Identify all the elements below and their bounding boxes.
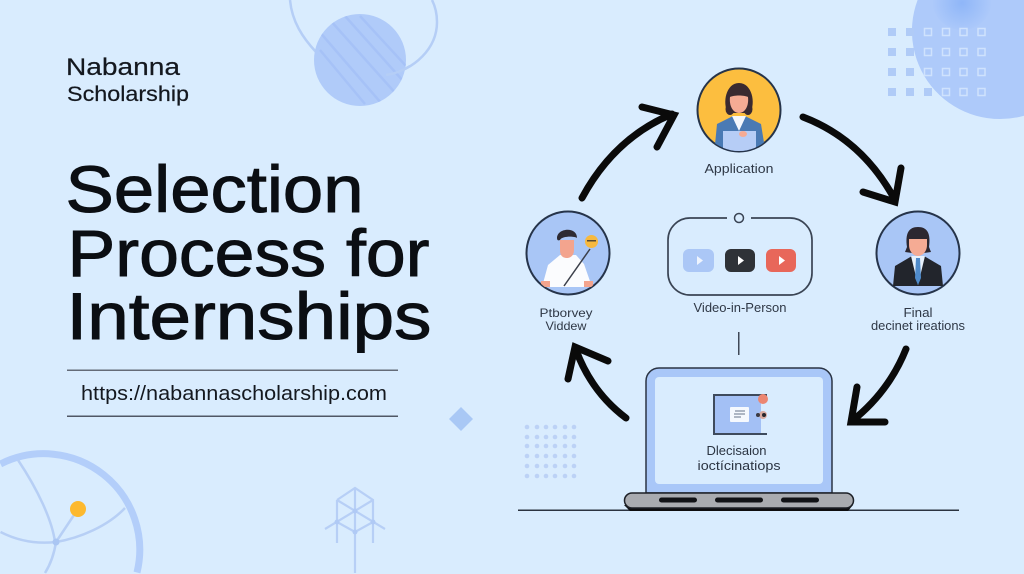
decoration: top-right glow [932, 0, 992, 30]
panel label: video in person: Video-in-Person [694, 300, 786, 315]
step: final decision [876, 212, 960, 294]
brand name: Nabanna [66, 54, 181, 81]
step label: preview video: Ptborvey [540, 306, 592, 320]
decoration: dot grid [525, 425, 576, 478]
laptop label: Dlecisaion [706, 443, 766, 458]
icon: red play button [766, 249, 796, 272]
connector line [738, 332, 740, 355]
laptop label [698, 443, 781, 473]
arrow: application to final [803, 117, 901, 202]
title [66, 152, 432, 353]
brand name: Scholarship [67, 83, 189, 106]
title: Internships [66, 279, 432, 353]
decoration: bottom-left network circle [0, 454, 140, 573]
decoration: diamond [449, 407, 473, 431]
decoration: top striped circle with ring [290, 0, 437, 106]
step label: application: Application [704, 161, 774, 176]
ground line [518, 510, 959, 511]
arrow: final to decision [851, 349, 906, 422]
laptop [624, 368, 854, 511]
arrow: decision to preview [568, 347, 626, 418]
title: Process for [68, 216, 430, 290]
step: application [698, 68, 780, 155]
step label: preview video: Viddew [546, 319, 587, 333]
laptop label: ioctícinatiops [698, 458, 781, 473]
brand name [66, 54, 189, 106]
title: Selection [66, 152, 364, 226]
website url with rules: https://nabannascholarship.com [81, 383, 387, 405]
decoration: tower icon [325, 488, 385, 573]
step label: final decision [871, 306, 965, 333]
icon: dark play button [725, 249, 755, 272]
decoration: square grid [888, 28, 985, 96]
decoration: top-right circle [912, 0, 1024, 119]
icon: document window [714, 394, 768, 434]
step: preview video [526, 212, 610, 294]
step label: preview video [540, 306, 592, 333]
icon: blue play button [683, 249, 714, 272]
step label: final decision: Final [904, 306, 932, 320]
step label: final decision: decinet ireations [871, 319, 965, 333]
panel: video options [668, 214, 812, 295]
arrow: preview to application [582, 107, 674, 198]
